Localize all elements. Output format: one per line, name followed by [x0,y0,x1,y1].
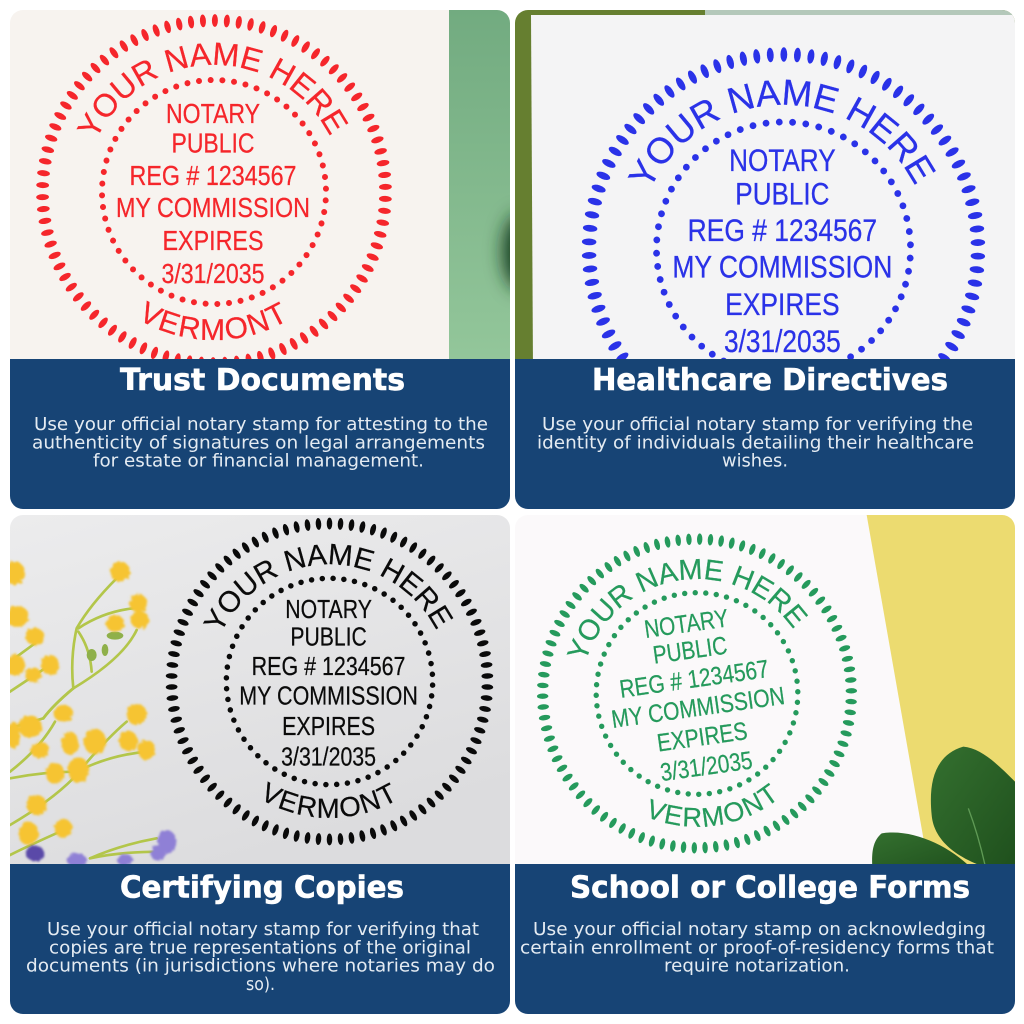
red notary stamp: REG # 1234567 [130,160,296,191]
red notary stamp: PUBLIC [172,128,254,159]
banner: trust documents: authenticity of signatures on legal arrangements [32,432,485,454]
black notary stamp: 3/31/2035 [281,743,376,771]
banner: healthcare directives: wishes. [722,450,788,472]
panel: school or college forms [515,515,1015,1014]
banner: trust documents: Trust Documents [120,363,405,398]
banner: school or college forms [515,864,1015,1014]
black notary stamp [166,518,494,846]
red notary stamp [36,14,392,359]
blue notary stamp: 3/31/2035 [724,323,841,359]
blue notary stamp: REG # 1234567 [688,212,877,248]
black notary stamp: PUBLIC [290,623,367,651]
banner: school or college forms: Use your official notary stamp on acknowledging [533,919,986,940]
banner: healthcare directives: Use your official notary stamp for verifying the [542,414,973,435]
red notary stamp: MY COMMISSION [116,192,310,223]
banner: certifying copies: copies are true representations of the original [49,938,471,958]
green notary stamp: EXPIRES [655,717,749,758]
banner: certifying copies: so). [246,974,275,995]
black notary stamp: MY COMMISSION [239,683,418,711]
banner: healthcare directives [515,359,1015,509]
green notary stamp: PUBLIC [651,632,729,670]
photo background: paper on olive fabric [515,10,1015,370]
green notary stamp: VERMONT [650,782,774,827]
green notary stamp: YOUR NAME HERE [566,558,808,655]
black notary stamp: YOUR NAME HERE [202,544,454,630]
banner: certifying copies: Certifying Copies [120,870,404,906]
yellow and purple flowers [5,562,176,867]
black notary stamp: VERMONT [266,781,392,818]
photo background: paper, yellow card and leaves [866,515,1015,864]
red notary stamp: EXPIRES [162,225,264,256]
green notary stamp: NOTARY [643,604,730,644]
black notary stamp: REG # 1234567 [252,653,405,681]
blue notary stamp: NOTARY [729,142,836,178]
black notary stamp: NOTARY [285,596,372,624]
red notary stamp: YOUR NAME HERE [76,42,348,136]
green notary stamp: 3/31/2035 [659,746,754,787]
banner: school or college forms: require notarization. [664,956,850,976]
banner: trust documents: for estate or financial management. [93,450,424,472]
banner: school or college forms: School or College Forms [570,870,970,906]
panel: healthcare directives [515,10,1015,509]
blue notary stamp [582,47,986,359]
green notary stamp: MY COMMISSION [610,682,787,734]
green notary stamp: REG # 1234567 [618,655,770,704]
banner: healthcare directives: identity of individuals detailing their healthcare [537,432,974,454]
red notary stamp: VERMONT [144,300,282,340]
red notary stamp: 3/31/2035 [162,258,264,289]
banner: school or college forms: certain enrollment or proof-of-residency forms that [520,938,994,958]
blue notary stamp: YOUR NAME HERE [628,80,936,185]
red notary stamp: NOTARY [166,98,260,129]
panel: trust documents [10,10,510,509]
photo background: paper and green card [10,10,539,370]
banner: certifying copies [10,864,510,1014]
photo background: gray wall [10,515,510,875]
blue notary stamp: EXPIRES [725,286,840,322]
banner: certifying copies: Use your official notary stamp for verifying that [47,919,479,940]
banner: certifying copies: documents (in jurisdictions where notaries may do [26,956,495,976]
blue notary stamp: PUBLIC [735,175,829,211]
panel: certifying copies [10,515,510,1014]
black notary stamp: EXPIRES [282,713,375,741]
green notary stamp [536,533,858,854]
blue notary stamp: MY COMMISSION [672,248,892,284]
banner: healthcare directives: Healthcare Directives [592,363,948,398]
banner: trust documents: Use your official notary stamp for attesting to the [34,414,488,435]
banner: trust documents [10,359,510,509]
